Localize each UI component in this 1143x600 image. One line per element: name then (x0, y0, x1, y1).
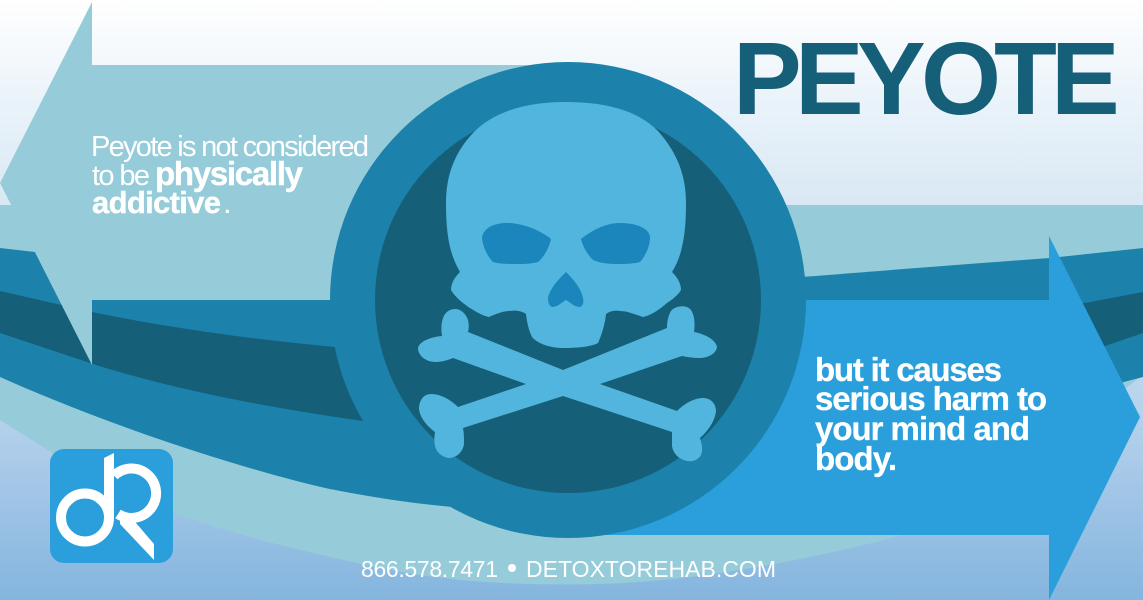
text block: left arrow message: physically (155, 155, 304, 192)
text block: right arrow message: body. (815, 440, 897, 477)
right eye socket (581, 223, 650, 264)
text block: left arrow message (91, 131, 369, 220)
circle badge (330, 62, 806, 538)
text block: right arrow message (815, 351, 1047, 477)
right arrow (590, 236, 1140, 600)
title: PEYOTE (733, 21, 1120, 136)
crossbones (418, 306, 717, 461)
text block: right arrow message: your mind and (815, 410, 1030, 447)
footer contact line (361, 556, 776, 582)
footer contact line: DETOXTOREHAB.COM (526, 556, 776, 582)
text block: left arrow message: to be (92, 160, 150, 192)
dark blue swoosh stripe (0, 291, 1143, 470)
text block: right arrow message: serious harm to (815, 380, 1047, 417)
text block: right arrow message: but it causes (815, 351, 1002, 388)
mid blue swoosh band (0, 248, 1143, 507)
skull cranium and jaw (446, 102, 686, 348)
nose (548, 272, 583, 307)
icon: dR logo (50, 449, 173, 563)
text block: left arrow message: Peyote is not considered (91, 131, 369, 163)
icon: skull and crossbones (418, 102, 717, 461)
left eye socket (482, 223, 551, 264)
text block: left arrow message: . (223, 185, 232, 220)
light teal swoosh band (0, 205, 1143, 584)
left arrow (0, 2, 568, 365)
footer contact line: 866.578.7471 (361, 556, 498, 582)
text block: left arrow message: addictive (92, 185, 221, 220)
